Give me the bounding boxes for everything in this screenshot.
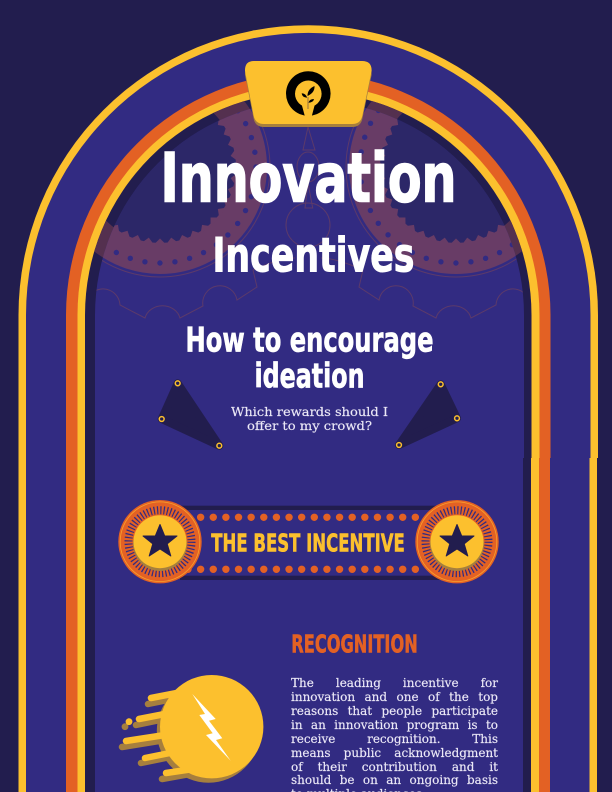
body text: recognition description: of their contribution and it [291, 760, 498, 774]
streaks [126, 692, 200, 773]
subheading question: Which rewards should I [231, 404, 388, 419]
title: Incentives: Incentives [212, 228, 414, 284]
icon: lightbulb with sprout [286, 71, 331, 116]
outlined gear teeth and centre mechanism [92, 127, 524, 318]
subheading question [231, 404, 388, 433]
body text: recognition description: receive recognition. This [291, 732, 498, 746]
banner dots [188, 517, 417, 569]
body text: recognition description: in an innovation program is to [291, 718, 498, 732]
body text: recognition description [291, 676, 498, 792]
body text: recognition description: should be on an ongoing basis [291, 773, 498, 787]
left pennant triangle [159, 381, 222, 448]
heading: recognition: RECOGNITION [291, 630, 418, 658]
left medal with star [118, 500, 202, 583]
badge with bulb logo [245, 61, 372, 127]
right gear [346, 108, 516, 278]
heading: How to encourage ideation: How to encourage [186, 320, 434, 360]
right side arch seam below y 458 [516, 458, 612, 792]
streak shadows [122, 698, 195, 779]
heading: How to encourage ideation: ideation [254, 356, 364, 396]
heading: How to encourage ideation [186, 320, 434, 396]
decorative gears behind the title [96, 108, 523, 319]
banner label: THE BEST INCENTIVE [211, 528, 405, 558]
body text: recognition description: innovation and one of the top [291, 690, 498, 704]
left gear [102, 109, 270, 278]
body text: recognition description: means public acknowledgment [291, 746, 498, 760]
body text: recognition description: The leading incentive for [291, 676, 498, 690]
arch: inner purple field [95, 101, 524, 792]
body text: recognition description: reasons that people participate [291, 704, 498, 718]
gear shadows on the inner dark band [94, 101, 522, 258]
title: Innovation: Innovation [160, 140, 456, 218]
right pennant triangle [397, 382, 459, 447]
icon: speeding lightning bolt circle [122, 675, 263, 783]
right medal with star [415, 500, 499, 583]
banner: the best incentive [118, 500, 499, 583]
subheading question: offer to my crowd? [247, 418, 372, 433]
